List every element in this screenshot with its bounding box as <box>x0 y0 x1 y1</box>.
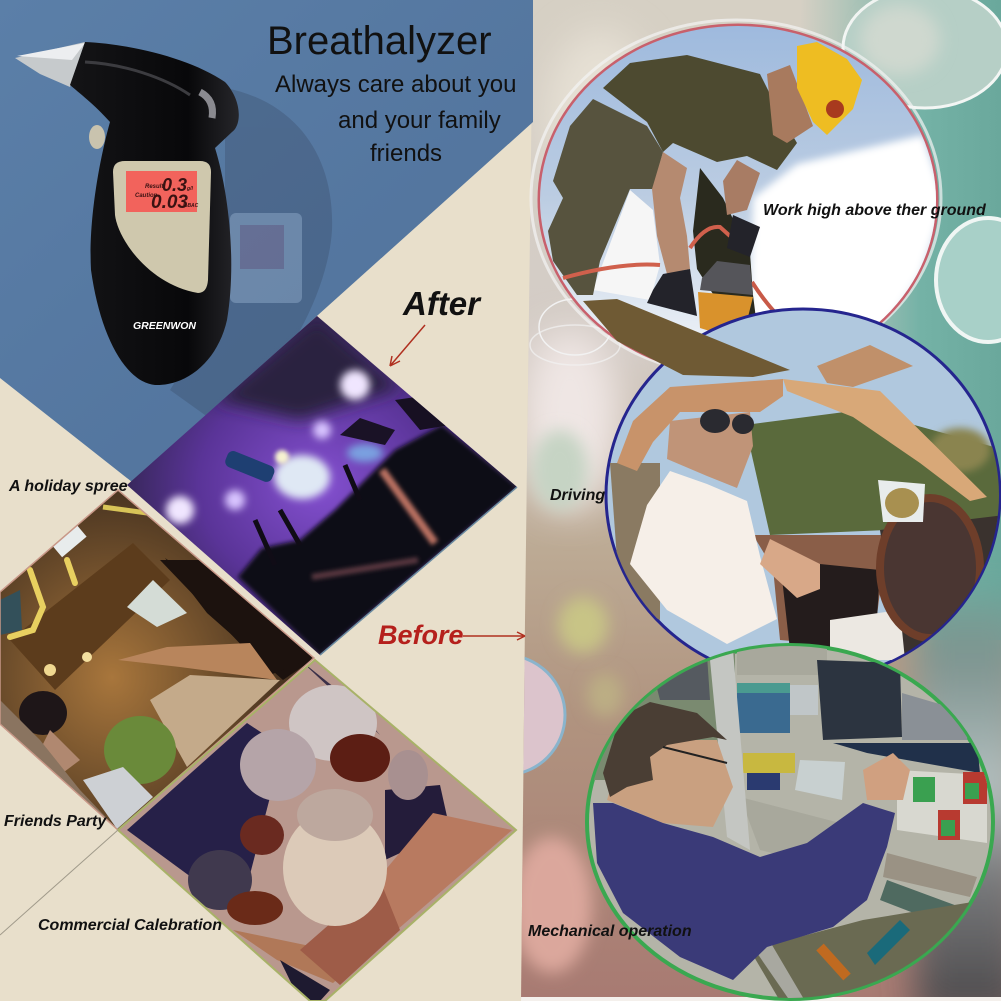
photo border: wine <box>118 660 516 1001</box>
panel: left beige background <box>0 0 534 1001</box>
icon: breathalyzer device: GREENWON <box>133 320 196 332</box>
photo: worker on roof <box>530 18 942 365</box>
tagline: and your family <box>338 107 501 134</box>
title: Breathalyzer <box>267 19 492 63</box>
tagline: friends <box>370 140 442 167</box>
panel: blue header area <box>0 0 533 482</box>
photo: wine glasses toast <box>110 655 530 1001</box>
arrow: after <box>390 325 425 366</box>
label: Commercial Calebration: Commercial Calebration <box>38 917 222 934</box>
label: Friends Party: Friends Party <box>4 813 107 830</box>
icon: breathalyzer device: Result <box>145 184 164 190</box>
icon: roof board <box>583 299 790 377</box>
label: Work high above ther ground: Work high above ther ground <box>763 202 987 219</box>
photo border: concert <box>320 487 517 655</box>
icon: breathalyzer device: 0.3 <box>162 175 187 195</box>
panel: right bubble background <box>521 0 1001 1001</box>
icon: breathalyzer device: Caution <box>135 193 158 199</box>
icon: breathalyzer device: %BAC <box>183 203 199 209</box>
icon: breathalyzer device: g/l <box>186 186 193 192</box>
photo: concert crowd <box>120 310 520 660</box>
label: A holiday spree: A holiday spree <box>8 478 128 495</box>
label: After: After <box>402 285 482 322</box>
icon: car visor <box>817 345 913 387</box>
tagline <box>275 71 516 167</box>
label: Mechanical operation: Mechanical operation <box>528 923 692 940</box>
photo: restaurant party <box>0 485 320 835</box>
photo: man driving <box>606 309 1001 681</box>
icon: breathalyzer device: 0.03 <box>151 192 188 213</box>
label: Driving: Driving <box>550 487 605 504</box>
arrow: before <box>463 632 525 640</box>
icon: device reflection <box>170 88 332 420</box>
photo border: party <box>0 490 314 830</box>
icon: breathalyzer device <box>15 42 239 385</box>
tagline: Always care about you <box>275 71 516 98</box>
label: Before: Before <box>378 620 464 650</box>
photo: mechanical operation <box>585 640 993 1001</box>
